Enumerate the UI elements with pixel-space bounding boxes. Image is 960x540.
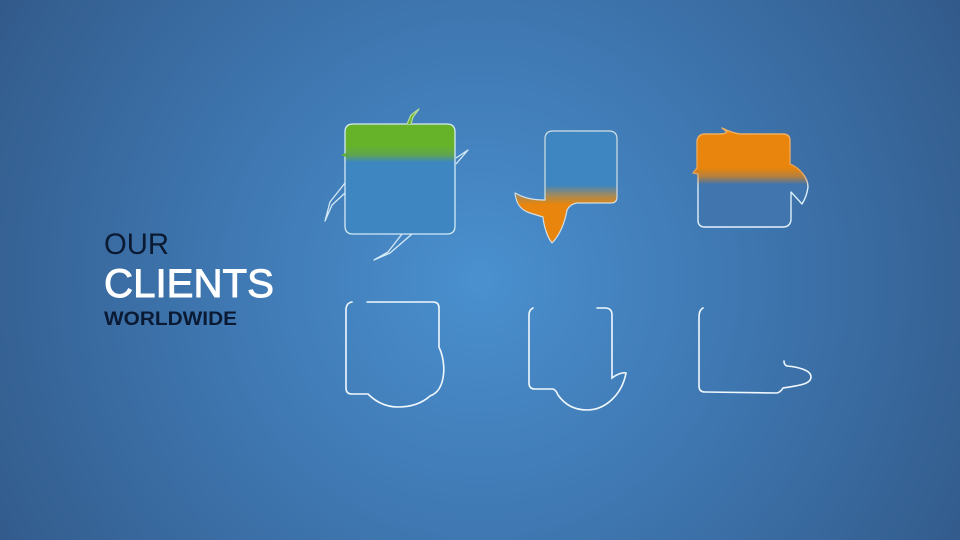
icon: green square with twigs: [325, 109, 468, 260]
icon: outline corner with right tail: [699, 308, 811, 393]
icon: orange square with wing: [693, 128, 808, 227]
icon: outline square with bottom-right bulge: [346, 302, 444, 407]
icon: outline square with bottom arc tail: [529, 308, 626, 410]
heading: [104, 228, 274, 330]
icon: orange-tailed square: [515, 131, 617, 243]
heading line: OUR: OUR: [104, 228, 169, 261]
heading line: CLIENTS: CLIENTS: [104, 262, 274, 306]
heading line: WORLDWIDE: WORLDWIDE: [104, 309, 237, 330]
